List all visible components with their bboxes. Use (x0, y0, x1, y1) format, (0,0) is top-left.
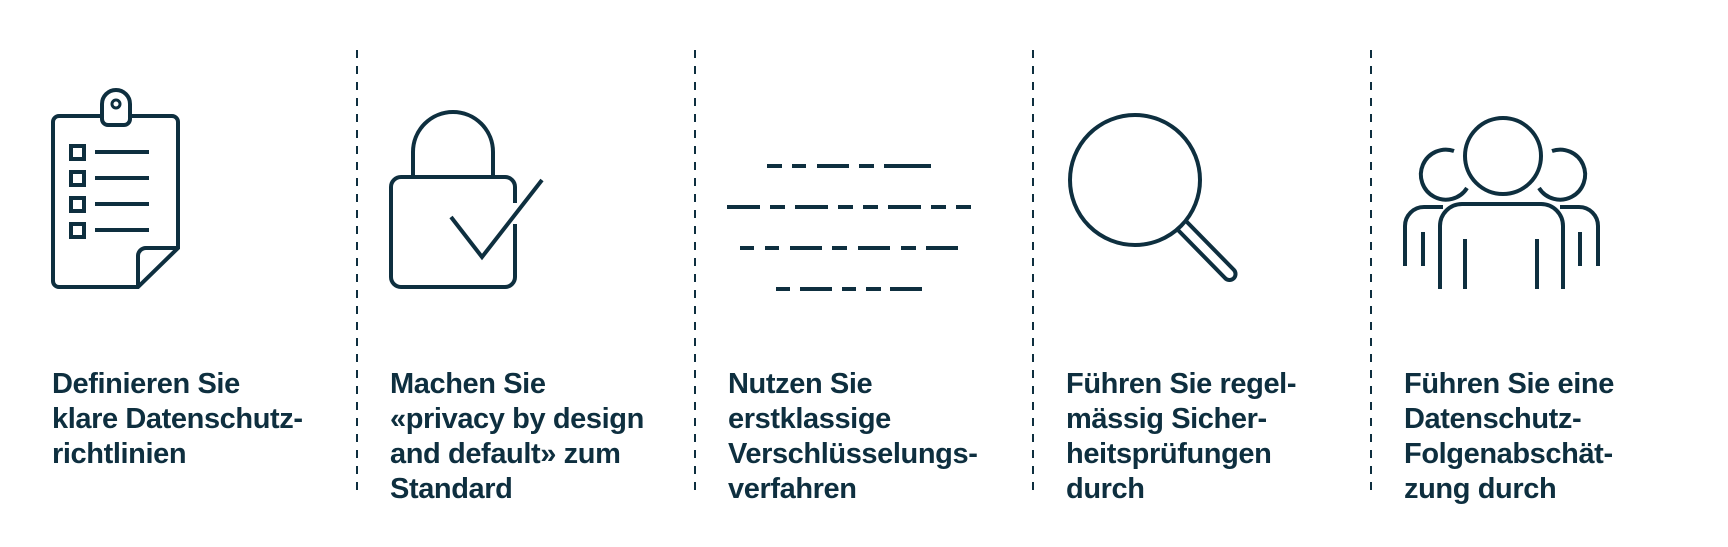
text: column 1: richtlinien (52, 438, 186, 470)
text: column 4: durch (1066, 473, 1145, 505)
text: column 1: klare Datenschutz- (52, 403, 303, 435)
icon: lock with check (391, 112, 542, 287)
text: column 4: Führen Sie regel- (1066, 368, 1296, 400)
icon: magnifier (1070, 115, 1236, 280)
text: column 2 (390, 368, 644, 505)
text: column 4 (1066, 368, 1296, 505)
text: column 3: Verschlüsselungs- (728, 438, 977, 470)
text: column 5: zung durch (1404, 473, 1556, 505)
text: column 3: erstklassige (728, 403, 891, 435)
text: column 3: verfahren (728, 473, 857, 505)
text: column 1: Definieren Sie (52, 368, 240, 400)
text: column 5 (1404, 368, 1614, 505)
icon: group of people (1405, 118, 1598, 289)
text: column 3: Nutzen Sie (728, 368, 872, 400)
text: column 4: mässig Sicher- (1066, 403, 1267, 435)
text: column 2: and default» zum (390, 438, 620, 470)
text: column 2: «privacy by design (390, 403, 644, 435)
text: column 3 (728, 368, 977, 505)
text: column 5: Folgenabschät- (1404, 438, 1613, 470)
text: column 5: Datenschutz- (1404, 403, 1581, 435)
text: column 4: heitsprüfungen (1066, 438, 1271, 470)
text: column 1 (52, 368, 303, 470)
text: column 5: Führen Sie eine (1404, 368, 1614, 400)
icon: encrypted text dashes (727, 166, 971, 289)
text: column 2: Machen Sie (390, 368, 546, 400)
icon: clipboard (53, 90, 178, 287)
text: column 2: Standard (390, 473, 512, 505)
